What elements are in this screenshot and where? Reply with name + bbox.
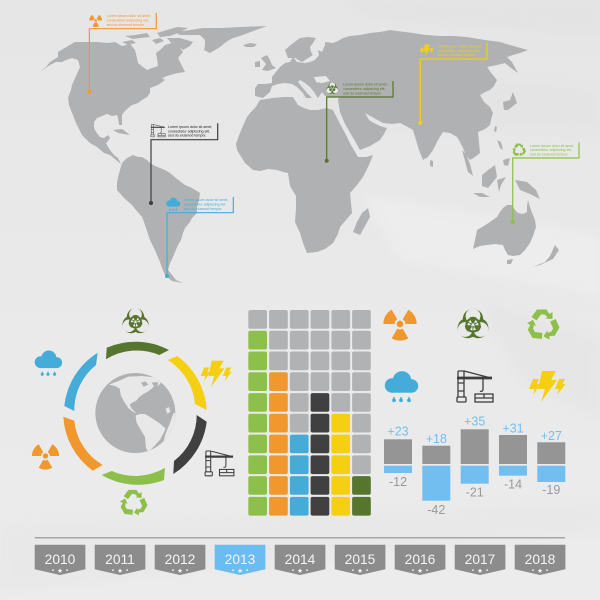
year 2015: 2015 [345,552,376,567]
timeline rule [35,537,565,538]
south america [117,155,200,283]
year 2014 [275,545,325,575]
callout: lightning [418,43,487,125]
ring diagram [63,342,207,485]
globe [95,373,176,453]
year 2017: 2017 [465,552,495,567]
ring segment: rain [64,353,98,411]
bar chart [384,414,565,517]
britain [261,55,276,71]
callout: radiation: sed do eiusmod tempor. [107,23,145,27]
ireland [255,61,260,67]
year 2017 [455,545,505,575]
ring segment: recycling [102,468,165,485]
tiles: biohazard column [352,476,371,516]
bar: +18 / -42: +18 [426,432,447,446]
ring segment: radiation [63,417,103,471]
new zealand [533,245,559,267]
year 2018 [515,545,565,575]
cuba [113,129,130,135]
bar: +31 / -14 [499,422,527,492]
icon: biohazard [458,309,488,338]
ring icon: radiation [30,443,61,470]
bar: +27 / -19 [537,429,565,497]
year 2013 (selected) [215,545,265,575]
callout: construction: consectetur adipiscing elit, [168,129,210,133]
icon: radiation [381,308,419,341]
iceland [243,43,257,47]
bar: +31 / -14: -14 [504,478,522,492]
callout: rain [165,197,233,278]
scandinavia [285,37,316,62]
ring icon: biohazard [122,308,149,333]
bar: +23 / -12: -12 [389,475,407,489]
sea patches [302,52,330,83]
bar: +35 / -21 [461,414,489,500]
bar: +18 / -42: -42 [427,503,445,517]
year 2016: 2016 [405,552,436,567]
bar: +23 / -12: +23 [387,424,409,438]
asian and pacific islands [353,92,540,235]
year 2012 [155,545,205,575]
callout: radiation: Lorem ipsum dolor sit amet, [107,14,151,18]
icon: lightning [529,371,566,402]
tiles: lightning column [331,414,350,516]
year 2010: 2010 [45,552,76,567]
callout: biohazard: consectetur adipiscing elit, [343,87,385,91]
world map [40,26,559,283]
north america [40,42,185,164]
callout: rain: consectetur adipiscing elit, [184,202,226,206]
australia [473,200,536,256]
ring icon: recycling [118,490,150,518]
bar: +23 / -12 [384,424,412,489]
callout: biohazard: Lorem ipsum dolor sit amet, [343,82,388,86]
callout: recycling: consectetur adipiscing elit, [530,148,572,152]
tiles: background gray [248,310,371,474]
callout: radiation: consectetur adipiscing elit, [107,19,149,23]
year 2014: 2014 [285,552,316,567]
ring segment: lightning [168,356,207,410]
callout: radiation [87,13,156,94]
callout: lightning: consectetur adipiscing elit, [438,49,480,53]
tiles: recycling column [248,331,267,516]
greenland [175,26,267,53]
ring segment: construction [173,415,207,474]
year 2013 (selected): 2013 [225,552,256,567]
ring segment: biohazard [106,342,169,359]
timeline years [35,545,565,575]
year 2011 [95,545,145,575]
callout: lightning: sed do eiusmod tempor. [438,53,476,57]
year 2012: 2012 [165,552,195,567]
tiles: radiation column [269,372,288,516]
year 2015 [335,545,385,575]
tasmania [507,259,513,264]
bar: +27 / -19: -19 [542,483,560,497]
callout: construction: sed do eiusmod tempor. [168,134,206,138]
icon: construction [457,371,493,402]
icon: recycling [525,310,562,343]
callout: biohazard: sed do eiusmod tempor. [343,92,382,96]
callout: biohazard [325,81,393,163]
year 2018: 2018 [525,552,556,567]
year 2011: 2011 [105,552,135,567]
ring icon: rain [35,350,62,376]
bar: +35 / -21: +35 [464,414,485,428]
year 2010 [35,545,85,575]
tiles: rain column [290,435,309,516]
ring icon: construction [205,451,234,476]
bar: +27 / -19: +27 [541,429,562,443]
callout: construction [149,123,218,205]
callout: lightning: Lorem ipsum dolor sit amet, [438,44,482,48]
tiles: construction column [311,393,329,516]
africa [236,97,373,253]
callout: recycling: Lorem ipsum dolor sit amet, [530,144,574,148]
callout: rain: sed do eiusmod tempor. [184,207,222,211]
callout: recycling [511,142,579,224]
year 2016 [395,545,445,575]
callout: rain: Lorem ipsum dolor sit amet, [184,198,228,202]
eurasia [255,30,528,160]
bar: +31 / -14: +31 [502,422,524,436]
bar: +35 / -21: -21 [466,486,484,500]
arctic islands [113,27,193,135]
stacked tile grid [248,310,371,516]
callout: recycling: sed do eiusmod tempor. [530,152,568,156]
callout: construction: Lorem ipsum dolor sit amet, [168,125,212,129]
ring icon: lightning [201,361,232,387]
icon: rain [385,371,418,402]
bar: +18 / -42 [422,432,450,517]
